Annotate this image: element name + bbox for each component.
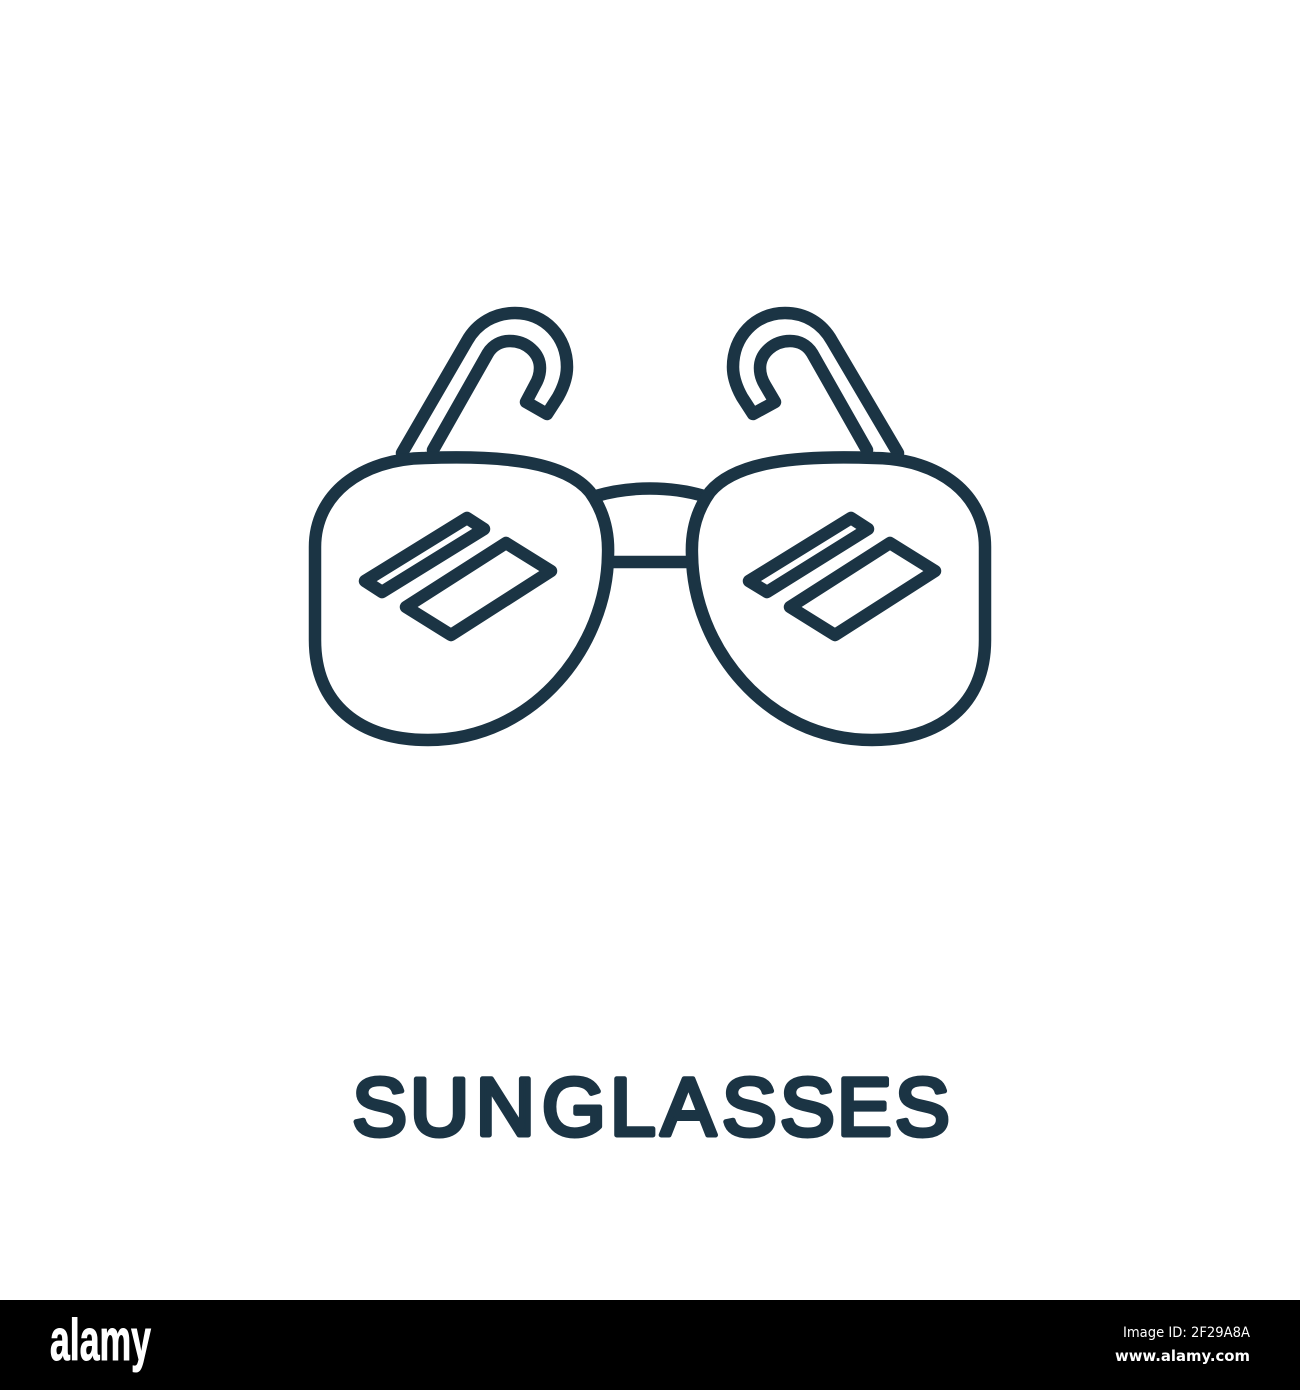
title: SUNGLASSES — [352, 1062, 950, 1153]
website: www.alamy.com — [1115, 1347, 1250, 1365]
icon: left lens wide reflection — [406, 543, 551, 635]
image id: Image ID: 2F29A8A — [1123, 1325, 1250, 1341]
icon: left lens narrow reflection — [365, 518, 484, 592]
icon: right lens narrow reflection — [749, 518, 868, 592]
icon: right temple arm — [733, 313, 898, 453]
icon: right lens wide reflection — [790, 543, 935, 635]
footer logo: alamy — [50, 1308, 151, 1373]
footer bar — [0, 1300, 1300, 1390]
icon: right lens — [692, 457, 985, 740]
icon: sunglasses — [315, 313, 985, 740]
icon: bridge — [596, 488, 704, 562]
icon: left temple arm — [402, 313, 567, 453]
icon: left lens — [315, 457, 608, 740]
